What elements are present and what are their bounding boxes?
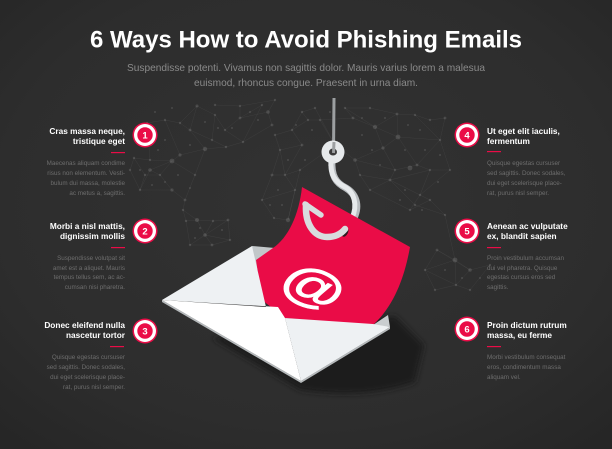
body 5: dui vel pharetra. Quisque <box>487 265 558 272</box>
phishing hook and line <box>322 98 357 218</box>
heading 5: Aenean ac vulputate <box>487 221 568 231</box>
envelope <box>162 246 390 383</box>
divider 3 <box>110 346 124 347</box>
heading 6: massa, eu ferme <box>487 330 552 340</box>
subtitle <box>127 62 485 89</box>
hook shank <box>332 160 357 218</box>
hook through sheet <box>305 204 350 238</box>
heading 5 <box>487 221 568 241</box>
envelope left panel <box>162 246 278 307</box>
body 6: Morbi vestibulum consequat <box>487 354 566 361</box>
item 1 <box>47 122 158 197</box>
body 5: sagittis. <box>487 284 509 291</box>
item 4 <box>454 122 566 197</box>
heading 2 <box>50 221 125 241</box>
heading 4: Ut eget elit iaculis, <box>487 126 560 136</box>
badge 3: 3 <box>142 326 148 337</box>
heading 1: tristique eget <box>73 136 125 146</box>
heading 6: Proin dictum rutrum <box>487 320 567 330</box>
divider 2 <box>111 247 125 248</box>
body 1: ac metus a, sagittis. <box>69 190 125 197</box>
subtitle: Suspendisse potenti. Vivamus non sagittis dolor. Mauris varius lorem a malesua <box>127 62 485 74</box>
body 2: Suspendisse volutpat sit <box>57 255 125 262</box>
badge 2: 2 <box>142 226 148 237</box>
body 6 <box>487 354 566 381</box>
heading 5: ex, blandit sapien <box>487 231 557 241</box>
body 1: risus non elementum. Vesti- <box>47 170 125 177</box>
body 1: bulum dui massa, molestie <box>50 180 125 187</box>
badge 5: 5 <box>464 226 470 237</box>
body 2 <box>53 255 125 291</box>
divider 1 <box>111 152 125 153</box>
envelope shadow <box>212 316 424 394</box>
body 4 <box>487 160 566 197</box>
body 3: sed sagittis. Donec sodales, <box>47 364 125 371</box>
body 3: dui eget scelerisque place- <box>50 374 125 381</box>
body 5: Proin vestibulum accumsan <box>487 255 564 262</box>
heading 1 <box>49 126 125 146</box>
divider 4 <box>487 151 501 152</box>
body 1: Maecenas aliquam condime <box>47 160 125 167</box>
hook eye <box>322 140 344 164</box>
item 5 <box>454 218 568 291</box>
body 4: Quisque egestas cursuser <box>487 160 560 167</box>
body 1 <box>47 160 125 197</box>
at symbol: @ <box>271 251 357 320</box>
body 3 <box>47 354 125 391</box>
envelope back flap <box>250 246 275 275</box>
item 6 <box>454 316 567 381</box>
heading 1: Cras massa neque, <box>49 126 125 136</box>
envelope edge <box>162 300 390 383</box>
body 2: cumsan nisi pharetra. <box>65 284 125 291</box>
body 2: amet est a aliquet. Mauris <box>53 265 125 272</box>
body 6: aliquam vel. <box>487 374 521 381</box>
body 3: Quisque egestas cursuser <box>52 354 125 361</box>
divider 5 <box>487 247 501 248</box>
heading 3 <box>44 320 126 340</box>
body 3: rat, purus nisl semper. <box>63 384 125 391</box>
body 5: egestas cursus eros sed <box>487 274 556 281</box>
envelope right panel <box>285 318 390 381</box>
body 4: rat, purus nisl semper. <box>487 190 549 197</box>
badge 4: 4 <box>464 130 470 141</box>
envelope front flap <box>162 300 301 381</box>
heading 4: fermentum <box>487 136 530 146</box>
body 4: dui eget scelerisque place- <box>487 180 562 187</box>
envelope right tab <box>373 315 390 327</box>
badge 6: 6 <box>464 324 470 335</box>
heading 3: Donec eleifend nulla <box>44 320 125 330</box>
item 2 <box>50 218 158 291</box>
red email sheet <box>256 187 410 325</box>
item 3 <box>44 318 158 391</box>
heading 4 <box>487 126 560 146</box>
heading 3: nascetur tortor <box>66 330 126 340</box>
world map network <box>129 99 491 291</box>
divider 6 <box>487 346 501 347</box>
heading 6 <box>487 320 567 340</box>
fishing line <box>332 98 336 152</box>
heading 2: Morbi a nisl mattis, <box>50 221 125 231</box>
body 5 <box>487 255 564 291</box>
body 6: eros, condimentum massa <box>487 364 561 371</box>
heading 2: dignissim mollis <box>60 231 125 241</box>
body 4: sed sagittis. Donec sodales, <box>487 170 566 177</box>
body 2: tempus tellus sem, ac ac- <box>54 274 125 281</box>
title: 6 Ways How to Avoid Phishing Emails <box>90 26 522 54</box>
subtitle: euismod, rhoncus congue. Praesent in urna diam. <box>194 77 418 89</box>
badge 1: 1 <box>142 130 148 141</box>
